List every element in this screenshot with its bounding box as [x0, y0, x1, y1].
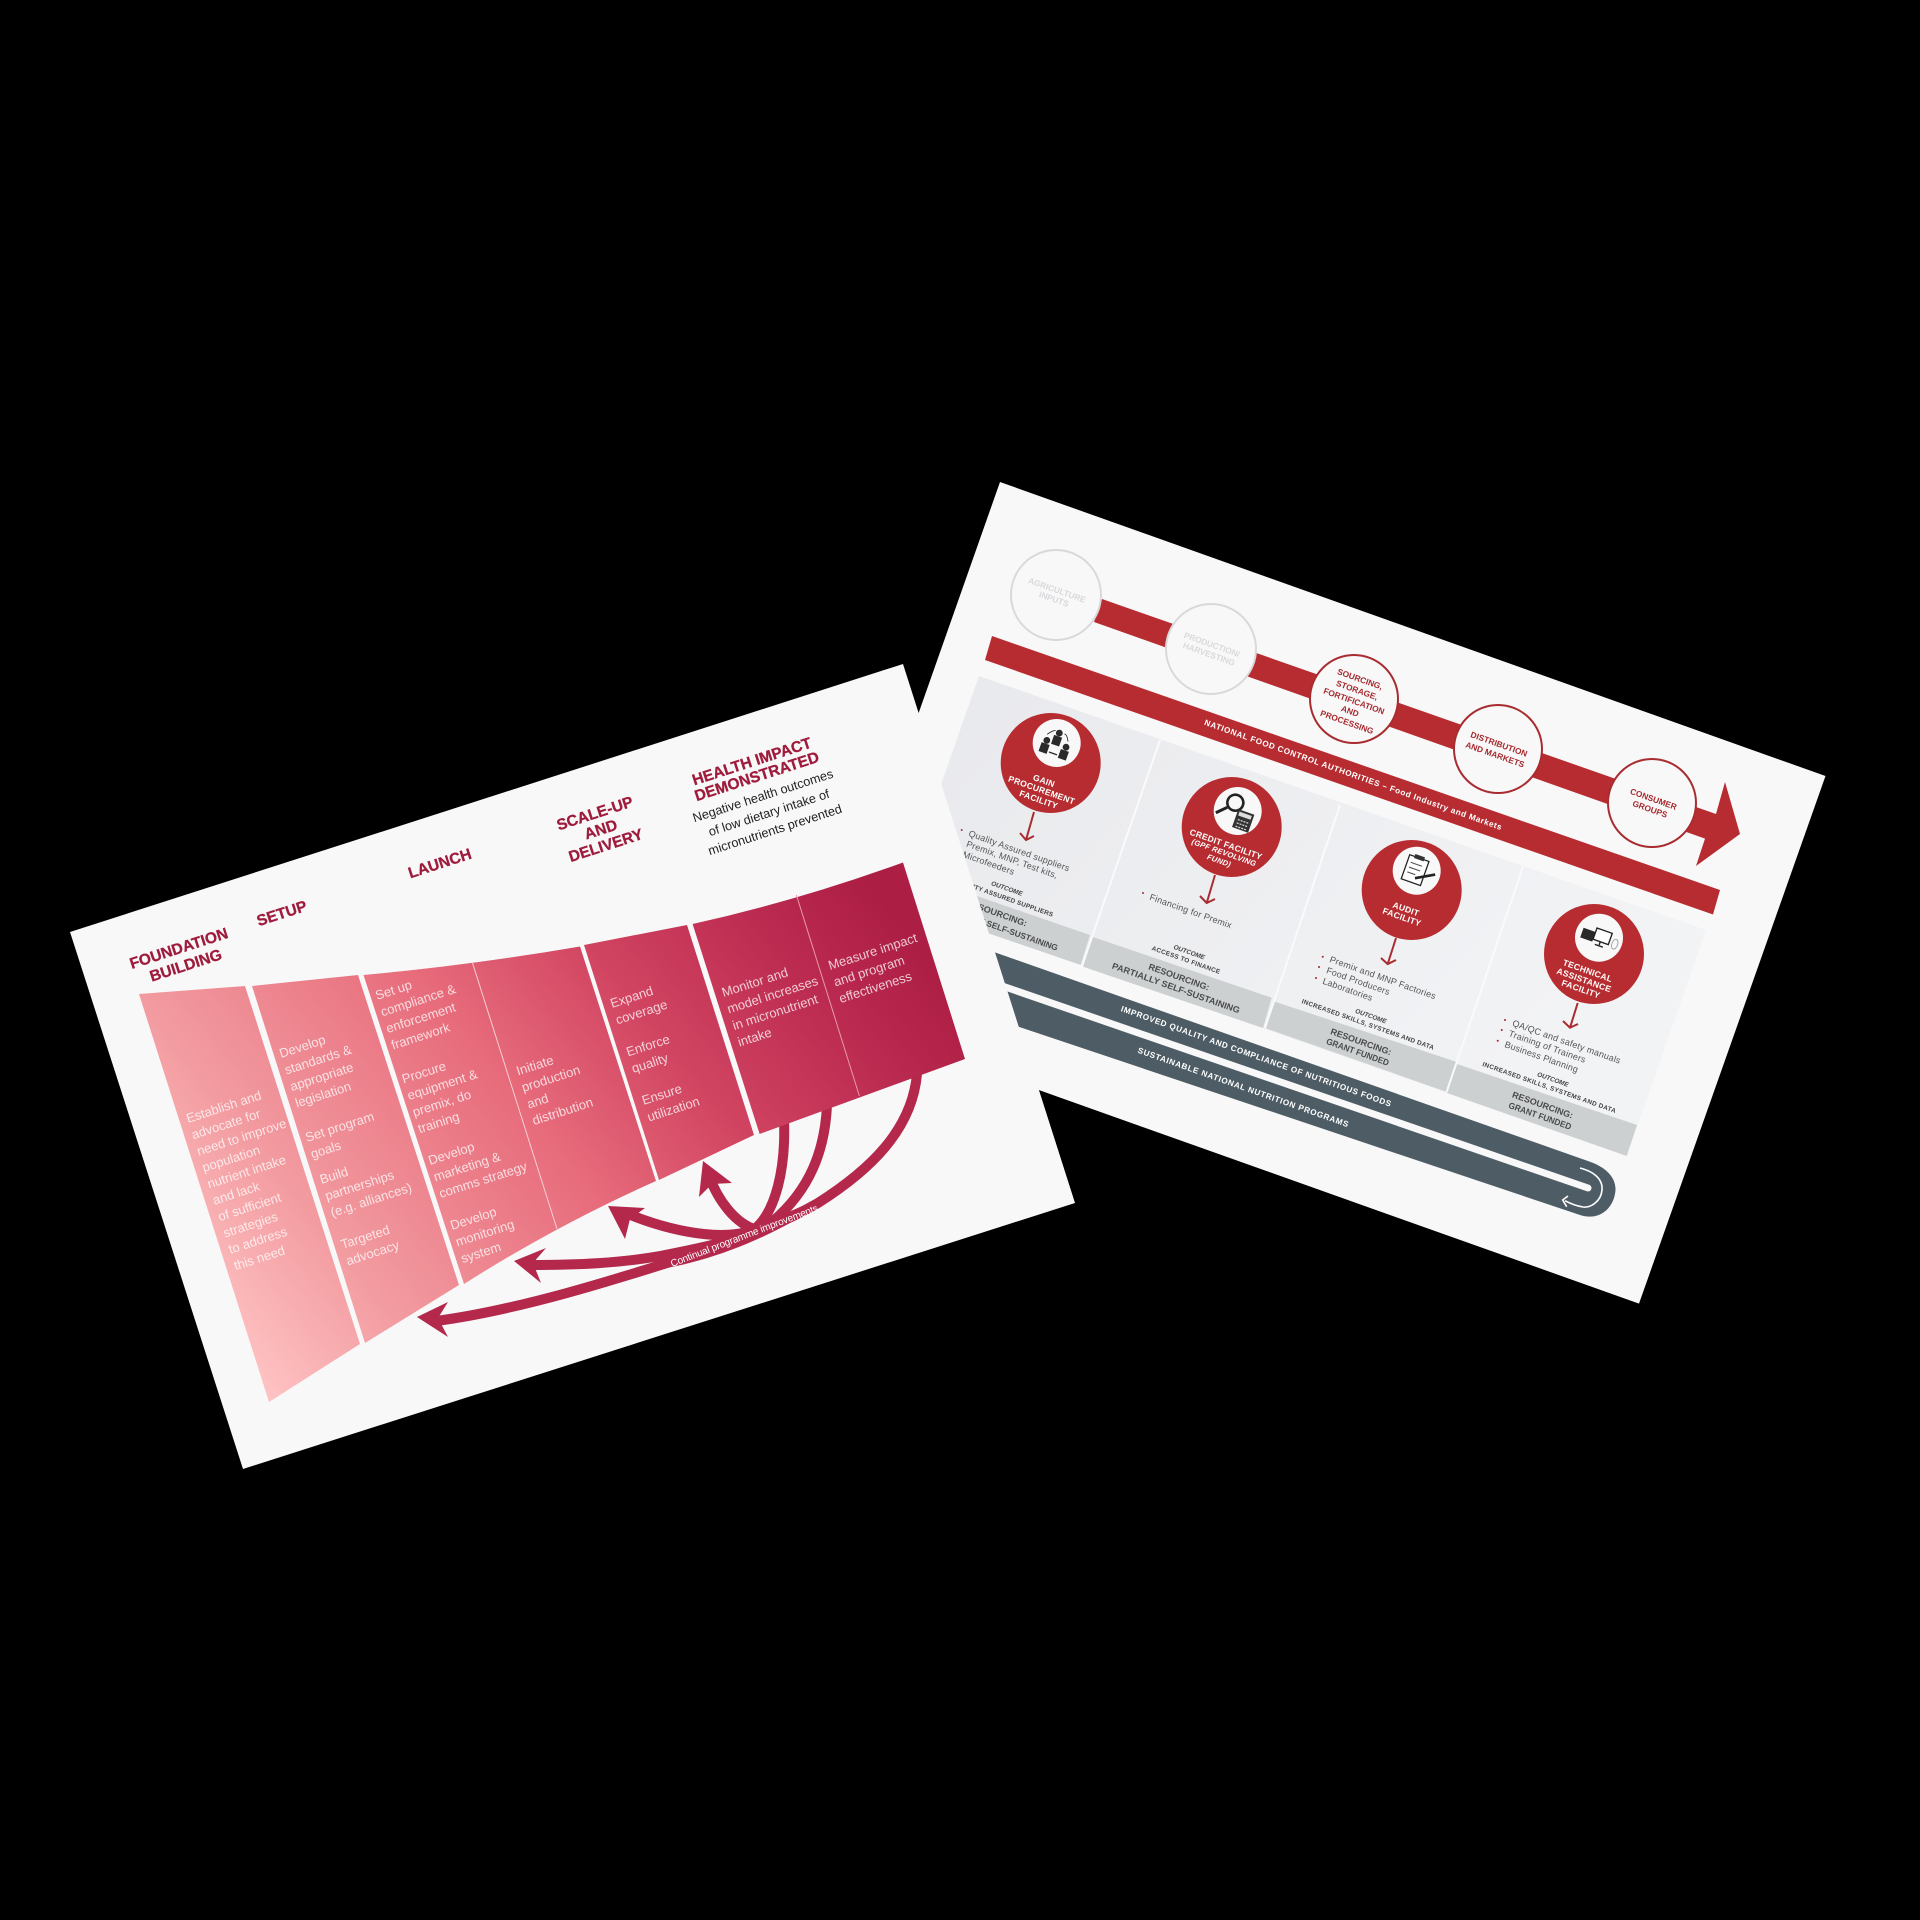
label: continual programme improvements: Continual programme improvements [669, 1203, 820, 1270]
funnel: launch segment: training [416, 1109, 461, 1136]
column: gain procurement facility: QUALITY ASSURED SUPPLIERS [954, 877, 1055, 919]
circle: distribution and markets: DISTRIBUTION [1469, 729, 1529, 759]
heading: setup: SETUP [255, 898, 309, 930]
circle: production harvesting [1166, 604, 1256, 694]
circle: sourcing storage fortification processing: AND [1340, 703, 1360, 719]
column: technical assistance facility: OUTCOME [1536, 1071, 1570, 1089]
circle: distribution and markets [1454, 705, 1542, 793]
column: technical assistance facility: FACILITY [1560, 978, 1602, 1000]
icon: people network [1039, 725, 1075, 761]
panel: programme stages card [70, 664, 1075, 1469]
funnel: launch segment: Develop [426, 1139, 476, 1168]
funnel: foundation segment: advocate for [190, 1106, 263, 1142]
heading: scale-up and delivery [555, 794, 646, 866]
national food control band [985, 636, 1720, 914]
circle: sourcing storage fortification processing: STORAGE, [1335, 678, 1379, 702]
funnel: launch segment: Develop [448, 1204, 498, 1233]
column: credit facility: PARTIALLY SELF-SUSTAINING [1111, 961, 1241, 1015]
heading: foundation building: FOUNDATION [128, 925, 230, 973]
icon: equipment and monitor [1580, 924, 1621, 952]
funnel: foundation segment: to address [227, 1224, 289, 1257]
column: credit facility: CREDIT FACILITY [1188, 827, 1264, 862]
text: health impact description: micronutrients prevented [706, 802, 844, 858]
funnel: setup segment [252, 975, 459, 1343]
funnel: launch segment: Set up [373, 977, 414, 1003]
column: credit facility: (GPF REVOLVING [1190, 837, 1258, 868]
funnel: setup segment: goals [309, 1137, 343, 1161]
funnel: foundation segment: population [200, 1142, 262, 1175]
circle: sourcing storage fortification processing: SOURCING, [1336, 666, 1384, 692]
funnel: health impact segment [693, 862, 965, 1134]
column: audit facility: Food Producers [1325, 965, 1392, 997]
funnel: launch segment: system [459, 1239, 503, 1266]
funnel: launch segment: enforcement [384, 999, 458, 1036]
icon: magnifier and calculator [1213, 790, 1259, 833]
funnel: setup segment: appropriate [288, 1059, 355, 1094]
funnel: setup segment: Build [318, 1164, 350, 1187]
funnel: scale-up segment: Expand [608, 983, 655, 1011]
column: technical assistance facility: ASSISTANCE [1555, 966, 1613, 994]
circle: agriculture inputs [1011, 550, 1101, 640]
column: audit facility: AUDIT [1391, 900, 1421, 918]
grey U-turn outcome bars [900, 919, 1616, 1217]
funnel: foundation segment: need to improve [195, 1116, 288, 1159]
circle: sourcing storage fortification processing: FORTIFICATION [1322, 686, 1386, 716]
column: gain procurement facility: FULLY SELF-SUSTAINING [958, 909, 1059, 953]
funnel: health impact segment: effectiveness [837, 968, 914, 1006]
funnel: setup segment: legislation [293, 1078, 353, 1111]
funnel: setup segment: (e.g. alliances) [329, 1180, 414, 1220]
national food control band: NATIONAL FOOD CONTROL AUTHORITIES – Food Industry and Markets [1203, 718, 1503, 832]
funnel: foundation segment: and lack [211, 1178, 262, 1208]
grey U-turn outcome bars: SUSTAINABLE NATIONAL NUTRITION PROGRAMS [1136, 1046, 1350, 1129]
funnel: launch segment: and [525, 1091, 550, 1111]
grey U-turn outcome bars: IMPROVED QUALITY AND COMPLIANCE OF NUTRITIOUS FOODS [1120, 1004, 1393, 1109]
column: technical assistance facility [1481, 904, 1644, 1132]
column: audit facility: FACILITY [1381, 906, 1423, 928]
circle: consumer groups: GROUPS [1631, 798, 1669, 820]
text: health impact description [691, 767, 844, 858]
column: gain procurement facility: RESOURCING: [965, 898, 1029, 928]
heading: scale-up and delivery: DELIVERY [567, 826, 646, 866]
funnel: scale-up segment: Ensure [640, 1081, 684, 1108]
text: health impact description: of low dietary intake of [707, 787, 832, 839]
funnel: scale-up segment: utilization [645, 1093, 701, 1124]
icon: clipboard and pen [1401, 852, 1439, 889]
heading: scale-up and delivery: AND [582, 817, 620, 843]
value chain red band with arrow [1094, 599, 1740, 866]
grey facility panel [900, 676, 1706, 1156]
column: gain procurement facility: OUTCOME [990, 880, 1024, 898]
funnel: launch segment: compliance & [379, 981, 458, 1019]
column: credit facility: Financing for Premix [1148, 892, 1233, 930]
funnel: health impact segment: in micronutrient [731, 991, 820, 1033]
icon: U-turn arrow [1563, 1168, 1602, 1207]
circle: production harvesting: PRODUCTION/ [1183, 630, 1242, 659]
funnel: scale-up segment [584, 925, 754, 1180]
funnel: scale-up segment: coverage [614, 997, 669, 1027]
column: credit facility: RESOURCING: [1147, 962, 1211, 992]
funnel: foundation segment: of sufficient [216, 1190, 283, 1224]
column: gain procurement facility: Quality Assured suppliers [967, 828, 1071, 873]
funnel: launch segment: framework [389, 1019, 452, 1053]
heading: health impact demonstrated: HEALTH IMPACT [690, 735, 814, 789]
funnel: foundation segment: this need [232, 1243, 287, 1273]
funnel: setup segment: standards & [283, 1042, 354, 1077]
column: audit facility [1301, 840, 1462, 1068]
funnel: launch segment: distribution [530, 1094, 595, 1128]
column: technical assistance facility: Training of Trainers [1507, 1028, 1587, 1065]
column: gain procurement facility: PROCUREMENT [1007, 774, 1077, 807]
column: technical assistance facility: Business Planning [1503, 1039, 1580, 1075]
funnel: launch segment: premix, do [411, 1087, 473, 1120]
column: technical assistance facility: INCREASED SKILLS, SYSTEMS AND DATA [1481, 1061, 1617, 1115]
column: audit facility: GRANT FUNDED [1325, 1036, 1390, 1068]
circle: agriculture inputs: INPUTS [1038, 589, 1071, 609]
funnel: health impact segment: Monitor and [720, 964, 790, 1000]
circle: sourcing storage fortification processing: PROCESSING [1319, 708, 1375, 736]
column: audit facility: RESOURCING: [1329, 1026, 1393, 1057]
column: credit facility: OUTCOME [1172, 944, 1206, 962]
funnel: foundation segment: strategies [221, 1209, 280, 1240]
funnel: setup segment: Set program [303, 1109, 376, 1145]
circle: agriculture inputs: AGRICULTURE [1027, 575, 1087, 605]
heading: health impact demonstrated: DEMONSTRATED [693, 749, 821, 805]
panel: value chain card [814, 482, 1826, 1304]
column: audit facility: Premix and MNP Factories [1328, 954, 1438, 1001]
text: health impact description: Negative health outcomes [691, 767, 835, 825]
funnel: setup segment: partnerships [323, 1167, 396, 1203]
column: gain procurement facility: Microfeeders [961, 849, 1016, 877]
column: technical assistance facility: TECHNICAL [1562, 957, 1614, 984]
funnel: launch segment [364, 946, 656, 1284]
funnel: health impact segment: and program [832, 952, 906, 989]
funnel: scale-up segment: quality [630, 1050, 671, 1076]
column: audit facility: OUTCOME [1354, 1008, 1388, 1026]
funnel: setup segment: Develop [277, 1032, 327, 1061]
column: credit facility: FUND) [1206, 852, 1232, 869]
funnel: launch segment: comms strategy [437, 1158, 529, 1201]
column: gain procurement facility: Premix, MNP, Test kits, [965, 839, 1059, 880]
funnel: health impact segment: model increases [725, 973, 820, 1016]
funnel: setup segment: Targeted [339, 1222, 392, 1252]
funnel: setup segment: advocacy [344, 1237, 402, 1268]
funnel: health impact segment: intake [736, 1025, 773, 1050]
funnel: launch segment: production [520, 1062, 582, 1095]
column: gain procurement facility: FACILITY [1018, 788, 1059, 811]
circle: sourcing storage fortification processing [1310, 655, 1398, 743]
circle: production harvesting: HARVESTING [1182, 640, 1236, 668]
column: credit facility: ACCESS TO FINANCE [1151, 945, 1221, 976]
column: audit facility: INCREASED SKILLS, SYSTEMS AND DATA [1301, 998, 1435, 1052]
column: gain procurement facility: GAIN [1032, 772, 1056, 789]
circle: consumer groups: CONSUMER [1629, 786, 1678, 812]
funnel: launch segment: equipment & [405, 1066, 480, 1103]
heading: foundation building: BUILDING [148, 946, 224, 986]
column: gain procurement facility [954, 713, 1101, 953]
column: technical assistance facility: QA/QC and safety manuals [1511, 1018, 1622, 1066]
funnel: foundation segment: Establish and [184, 1088, 263, 1126]
feedback arrows [417, 1074, 917, 1337]
funnel: scale-up segment: Enforce [624, 1031, 672, 1059]
circle: distribution and markets: AND MARKETS [1464, 739, 1526, 770]
funnel: foundation segment: nutrient intake [205, 1152, 288, 1191]
heading: launch: LAUNCH [406, 846, 474, 882]
heading: scale-up and delivery: SCALE-UP [555, 794, 635, 834]
column: credit facility [1111, 777, 1282, 1015]
funnel: launch segment: monitoring [454, 1216, 516, 1249]
funnel: launch segment: Initiate [514, 1052, 555, 1078]
funnel: foundation segment [139, 986, 360, 1402]
column: technical assistance facility: RESOURCING: [1511, 1090, 1575, 1120]
funnel: launch segment: Procure [400, 1058, 448, 1086]
column: technical assistance facility: GRANT FUNDED [1507, 1100, 1573, 1132]
funnel: health impact segment: Measure impact [826, 930, 919, 973]
funnel: launch segment: marketing & [432, 1149, 503, 1184]
column: audit facility: Laboratories [1321, 976, 1374, 1003]
circle: consumer groups [1608, 759, 1696, 847]
